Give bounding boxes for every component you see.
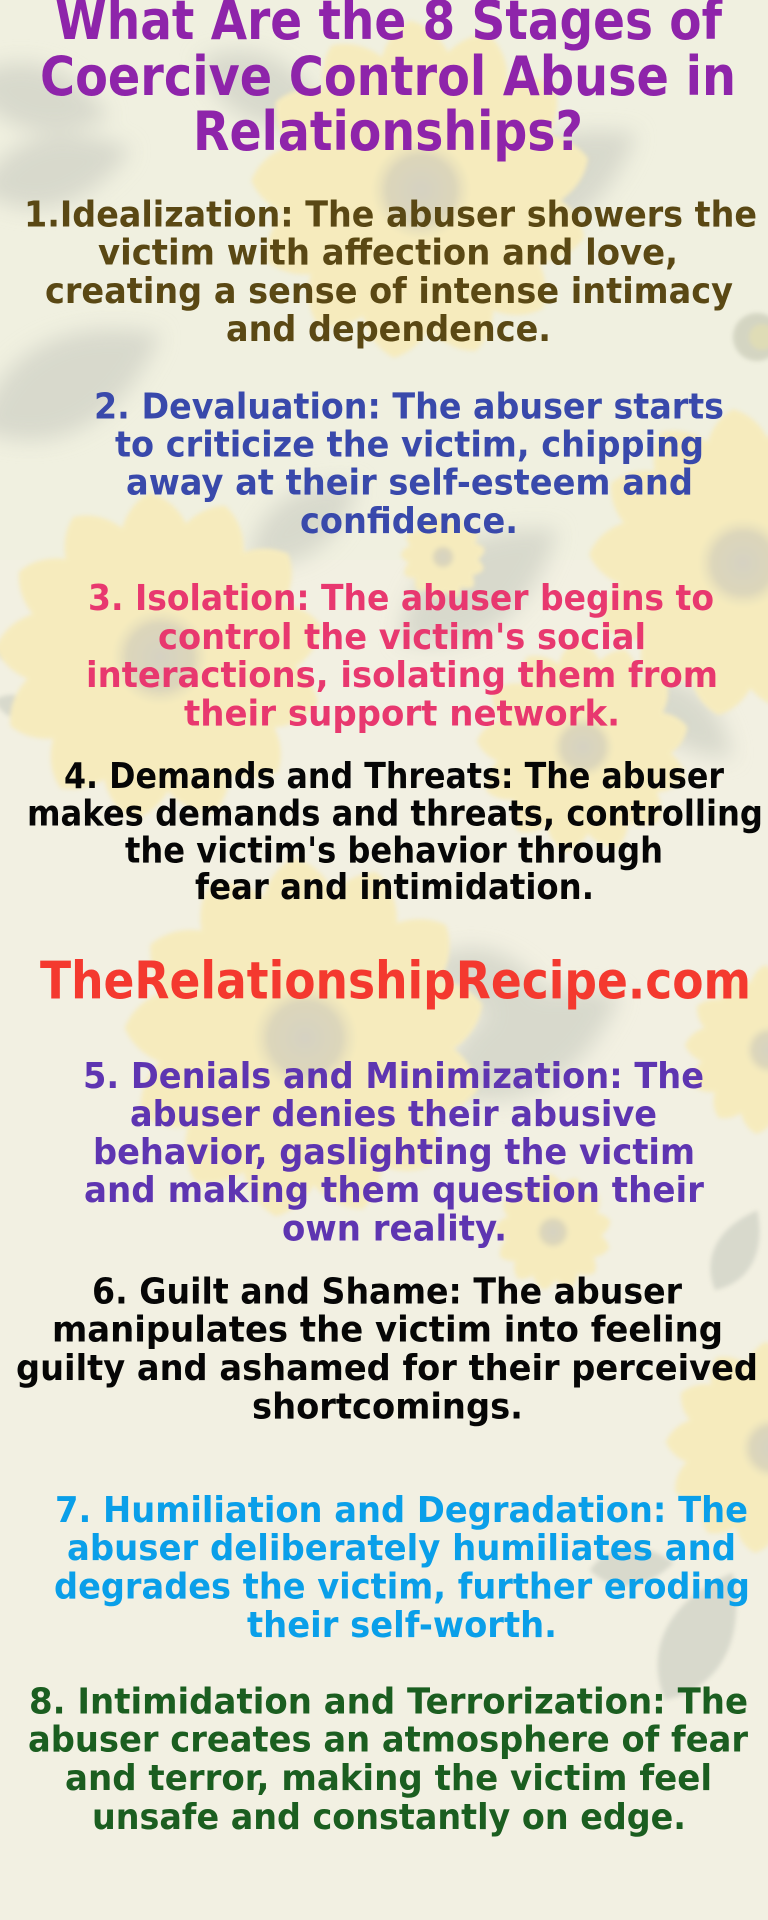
stage 3: Isolation: control the victim's social <box>158 617 646 658</box>
stage 7: Humiliation and Degradation: their self-worth. <box>247 1605 557 1646</box>
stage 3: Isolation: 3. Isolation: The abuser begins to <box>88 578 714 619</box>
icon: small grey flower top right <box>733 313 768 361</box>
stage 7: Humiliation and Degradation <box>54 1490 750 1646</box>
stage 8: Intimidation and Terrorization: unsafe and constantly on edge. <box>92 1797 686 1838</box>
stage 2: Devaluation: away at their self-esteem and <box>126 462 693 504</box>
stage 6: Guilt and Shame: manipulates the victim into feeling <box>52 1310 723 1350</box>
stage 2: Devaluation: 2. Devaluation: The abuser starts <box>94 386 724 428</box>
stage 1: Idealization: creating a sense of intense intimacy <box>45 271 733 312</box>
title: Relationships? <box>193 100 583 163</box>
stage 8: Intimidation and Terrorization: 8. Intimidation and Terrorization: The <box>29 1682 748 1722</box>
stage 3: Isolation: their support network. <box>184 694 620 734</box>
stage 1: Idealization: and dependence. <box>226 309 551 350</box>
stage 7: Humiliation and Degradation: abuser deliberately humiliates and <box>67 1528 736 1569</box>
stage 6: Guilt and Shame: shortcomings. <box>252 1386 523 1428</box>
stage 5: Denials and Minimization: behavior, gaslighting the victim <box>93 1132 695 1173</box>
stage 6: Guilt and Shame: 6. Guilt and Shame: The abuser <box>92 1272 682 1312</box>
stage 8: Intimidation and Terrorization <box>28 1682 748 1838</box>
stage 5: Denials and Minimization: abuser denies their abusive <box>130 1094 657 1135</box>
stage 4: Demands and Threats: fear and intimidation. <box>195 867 594 908</box>
stage 6: Guilt and Shame <box>16 1272 758 1428</box>
stage 3: Isolation: interactions, isolating them from <box>86 655 718 696</box>
stage 2: Devaluation: confidence. <box>300 501 518 542</box>
stage 2: Devaluation: to criticize the victim, chipping <box>115 424 704 466</box>
stage 8: Intimidation and Terrorization: and terror, making the victim feel <box>65 1758 712 1799</box>
stage 3: Isolation <box>86 578 718 734</box>
stage 5: Denials and Minimization: 5. Denials and Minimization: The <box>83 1056 704 1097</box>
stage 4: Demands and Threats <box>27 756 763 908</box>
stage 4: Demands and Threats: the victim's behavior through <box>125 830 663 872</box>
title <box>40 0 736 163</box>
stage 5: Denials and Minimization <box>83 1056 704 1250</box>
stage 1: Idealization <box>24 194 757 350</box>
stage 5: Denials and Minimization: own reality. <box>282 1208 507 1250</box>
stage 5: Denials and Minimization: and making them question their <box>84 1170 704 1211</box>
stage 2: Devaluation <box>94 386 724 542</box>
stage 1: Idealization: victim with affection and love, <box>98 232 678 274</box>
